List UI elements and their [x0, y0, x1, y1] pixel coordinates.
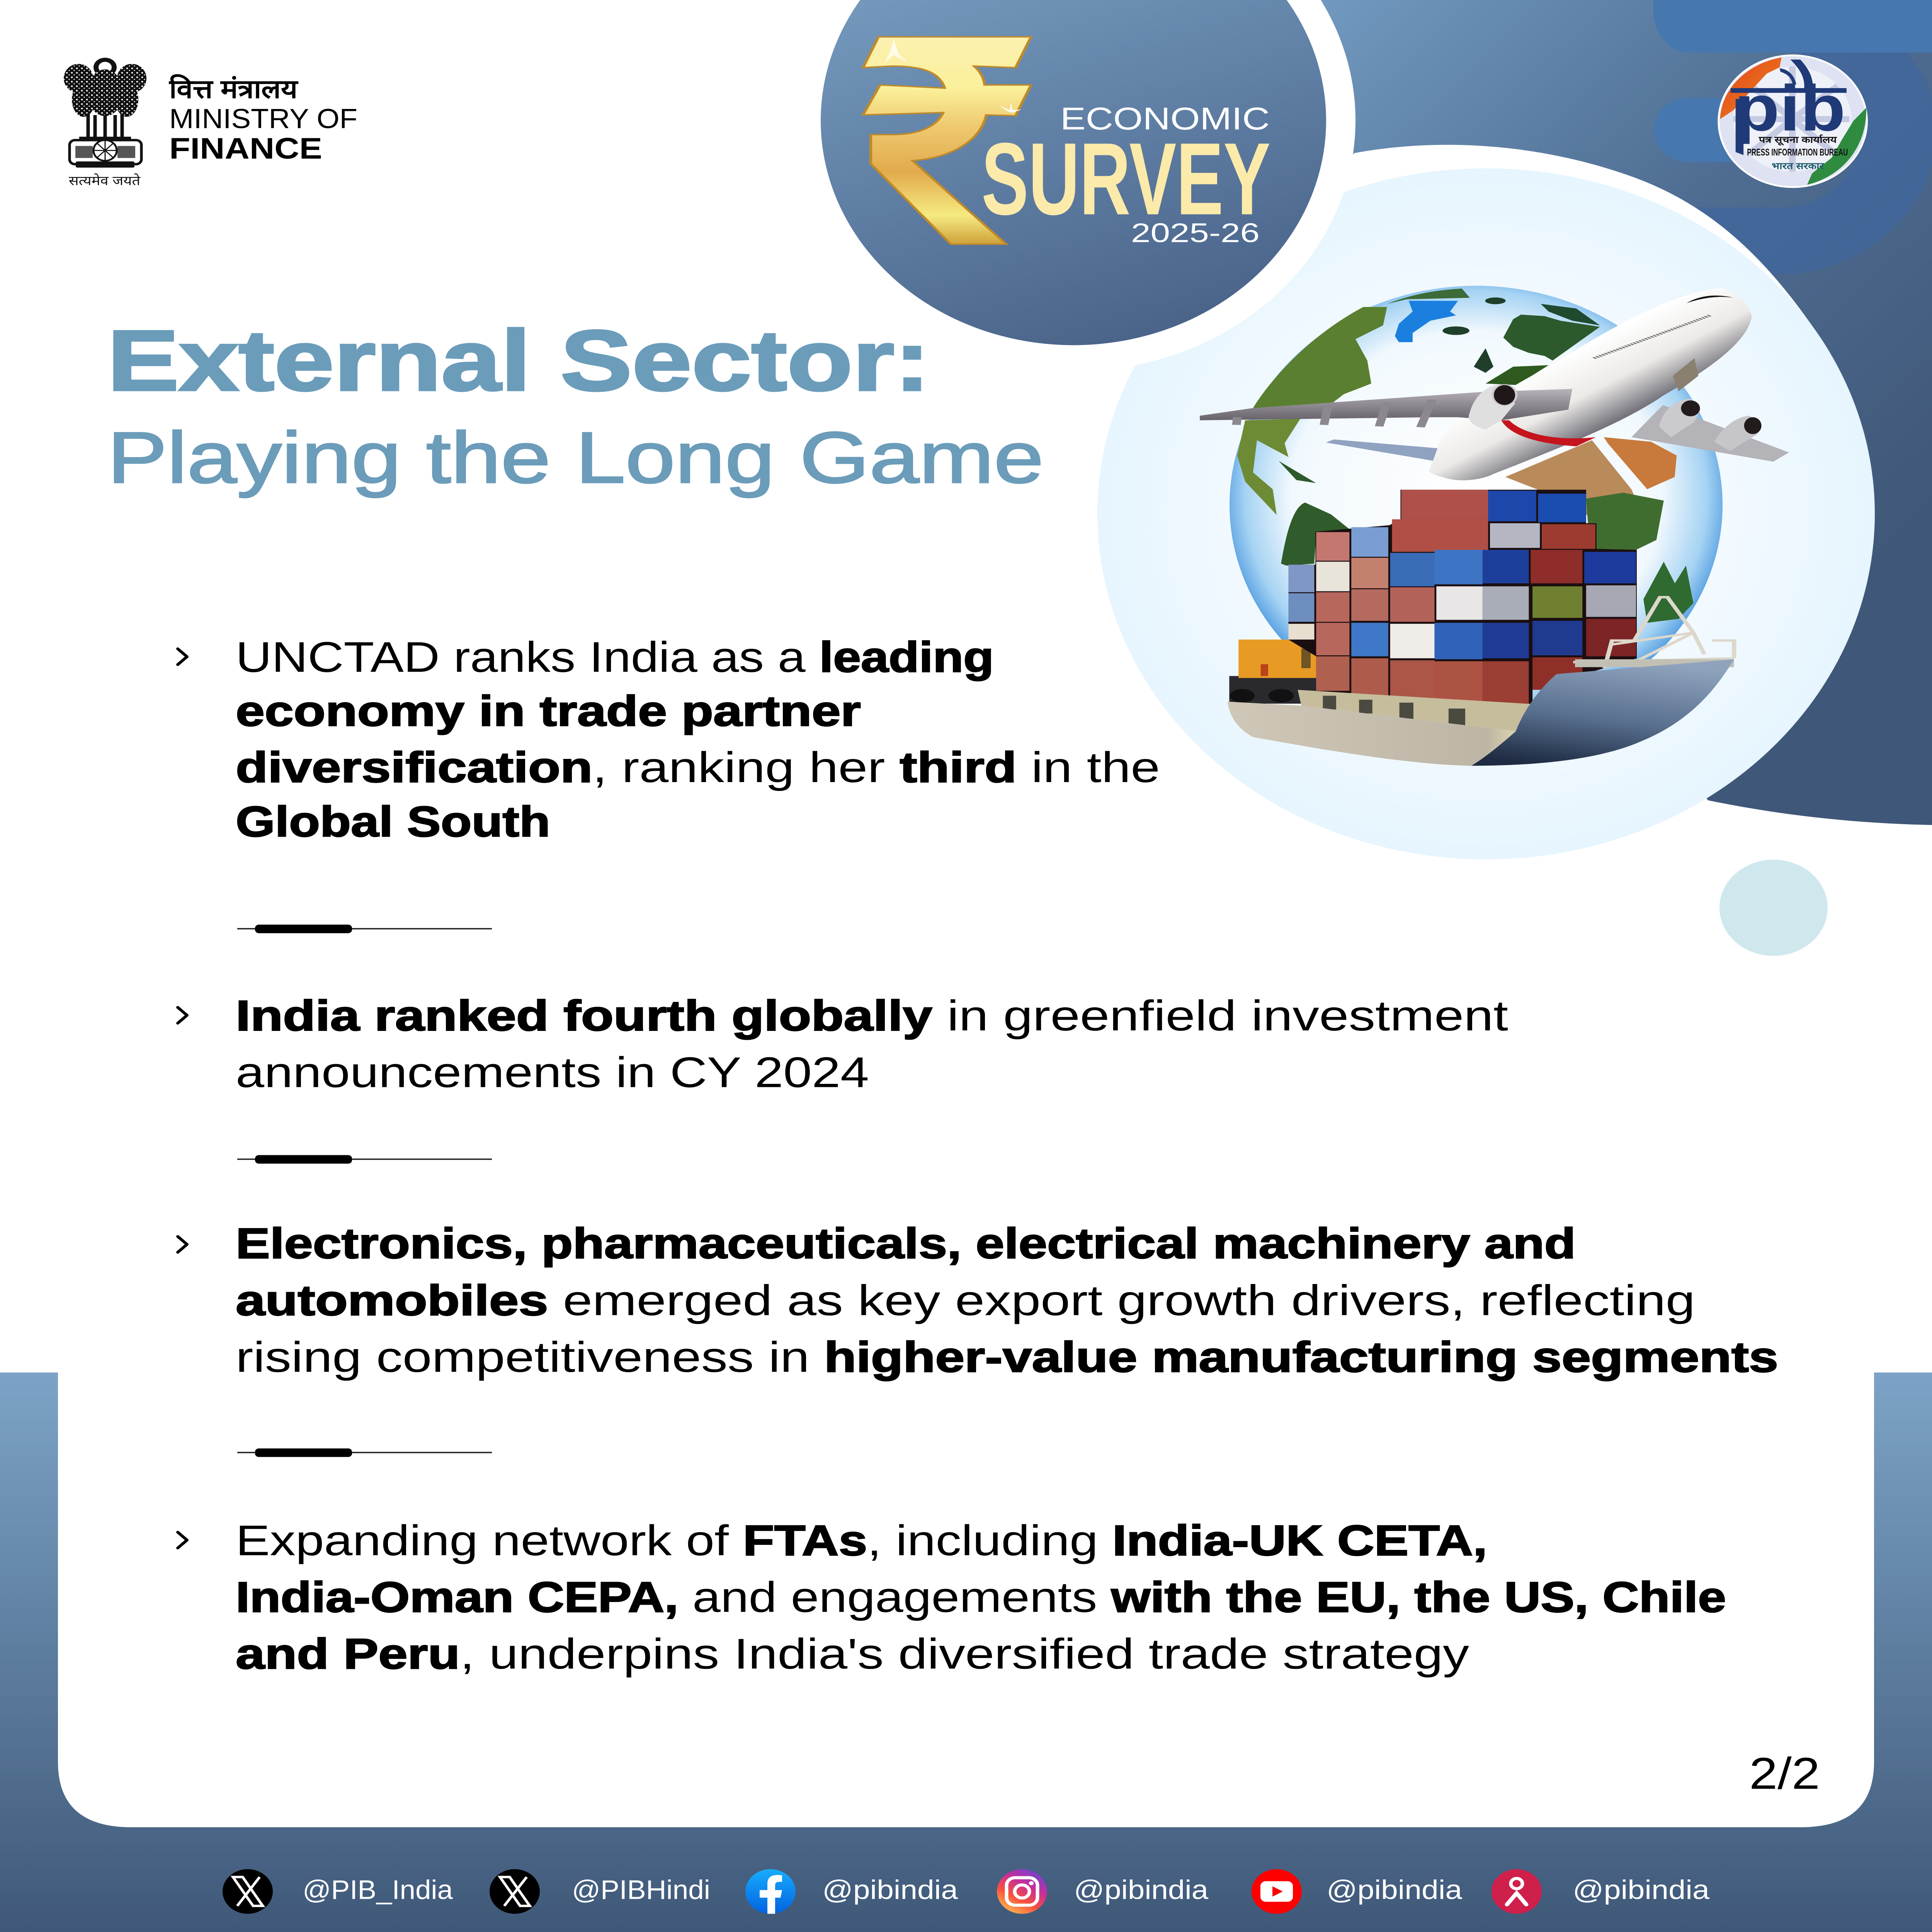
- handle: @PIB_India: [303, 1875, 453, 1905]
- icon: national emblem: [64, 58, 146, 168]
- ship with containers: [1228, 490, 1734, 766]
- icon: Facebook: [745, 1869, 796, 1914]
- bullet 1: [178, 633, 1160, 846]
- chevron: [178, 1007, 187, 1023]
- heading: [107, 313, 1044, 498]
- subtitle: Playing the Long Game: [107, 417, 1044, 498]
- white ring around survey badge: [791, 0, 1355, 371]
- icon: YouTube: [1252, 1869, 1302, 1914]
- globe: [1230, 286, 1723, 724]
- plane: rear stabiliser: [1326, 439, 1442, 462]
- text: emblem motto: सत्यमेव जयते: [69, 173, 141, 188]
- text line: Electronics, pharmaceuticals, electrical machinery and: [236, 1219, 1576, 1267]
- logo: Ministry of Finance: [64, 58, 357, 188]
- text line: economy in trade partner: [236, 687, 861, 735]
- truck: [1229, 639, 1316, 704]
- icon: X: [490, 1869, 540, 1914]
- text: Hindi office name: पत्र सूचना कार्यालय: [1759, 134, 1837, 146]
- text line: automobiles emerged as key export growth drivers, reflecting: [236, 1277, 1695, 1325]
- icon: Instagram: [997, 1869, 1047, 1914]
- badge: Economic Survey: [821, 0, 1326, 345]
- plane: left wing: [1200, 389, 1572, 420]
- text line: and Peru , underpins India's diversified trade strategy: [236, 1630, 1469, 1678]
- ship superstructure: [1573, 597, 1734, 668]
- handle: @PIBHindi: [572, 1875, 710, 1905]
- handle: @pibindia: [1573, 1875, 1710, 1905]
- ship deck: [1298, 690, 1542, 731]
- icon: X: [223, 1869, 273, 1914]
- page number: 2/2: [1749, 1749, 1820, 1799]
- chevron: [178, 649, 187, 665]
- light blue circle backdrop: [1097, 168, 1875, 859]
- plane: right wing and engines: [1631, 399, 1789, 462]
- text line: Global South: [236, 798, 550, 846]
- text: SURVEY: SURVEY: [981, 121, 1270, 236]
- decorative pale circle: [1719, 860, 1828, 956]
- text line: rising competitiveness in higher-value manufacturing segments: [236, 1333, 1778, 1381]
- text: ECONOMIC: ECONOMIC: [1060, 101, 1270, 136]
- text: 2025-26: 2025-26: [1131, 218, 1260, 248]
- text line: India ranked fourth globally in greenfield investment: [236, 992, 1508, 1040]
- illustration: globe, plane and cargo ship: [1200, 286, 1789, 766]
- title: External Sector:: [107, 313, 930, 409]
- text line: India-Oman CEPA, and engagements with the EU, the US, Chile: [236, 1573, 1726, 1621]
- container stack: [1288, 490, 1637, 705]
- icon: Koo style: [1492, 1869, 1542, 1914]
- text: Bharat Sarkar: भारत सरकार: [1772, 161, 1825, 171]
- text line: Expanding network of FTAs, including India-UK CETA,: [236, 1517, 1487, 1565]
- plane: fuselage: [1429, 288, 1752, 480]
- bullet 2: [178, 992, 1508, 1097]
- white cap over blue: [1314, 145, 1828, 514]
- text line: UNCTAD ranks India as a leading: [236, 633, 994, 681]
- ship hull: [1228, 702, 1597, 766]
- icon: gold rupee: [863, 37, 1031, 244]
- footer: social handles: [223, 1869, 1710, 1914]
- bottom panel: white card: [58, 1371, 1874, 1827]
- text line: diversification , ranking her third in the: [236, 743, 1160, 791]
- divider 3: [237, 1448, 492, 1457]
- text: FINANCE: FINANCE: [169, 132, 322, 165]
- handle: @pibindia: [822, 1875, 958, 1905]
- background shape: top right blue: [1314, 0, 1932, 825]
- handle: @pibindia: [1327, 1875, 1463, 1905]
- text line: announcements in CY 2024: [236, 1049, 869, 1097]
- text: Press Information Bureau: PRESS INFORMATION BUREAU: [1747, 147, 1848, 158]
- text: Hindi ministry name: वित्त मंत्रालय: [168, 74, 298, 104]
- chevron: [178, 1532, 187, 1548]
- plane: left engine: [1469, 384, 1515, 430]
- text: MINISTRY OF: MINISTRY OF: [169, 104, 357, 134]
- blue pills: top right: [1653, 0, 1932, 275]
- handle: @pibindia: [1074, 1875, 1209, 1905]
- plane: [1200, 288, 1789, 480]
- divider 2: [237, 1155, 492, 1164]
- bottom panel: blue frame: [0, 1372, 1932, 1932]
- divider 1: [237, 925, 492, 933]
- chevron: [178, 1236, 187, 1252]
- bullet 4: [178, 1517, 1726, 1678]
- plane: red stripe: [1501, 420, 1596, 446]
- logo: PIB: [1719, 55, 1867, 187]
- text: pib wordmark: pib: [1734, 72, 1845, 144]
- bullet 3: [178, 1219, 1778, 1381]
